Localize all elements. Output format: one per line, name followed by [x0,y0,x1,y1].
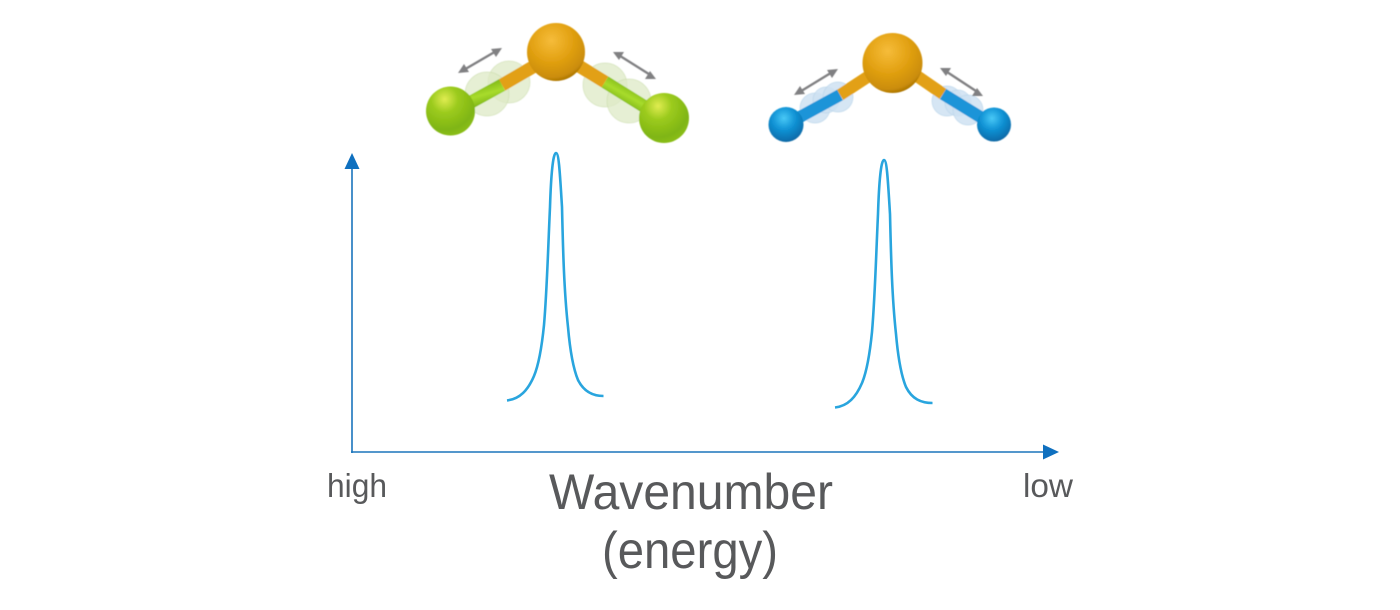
vibration arrow right [940,68,983,96]
bonds [462,63,650,110]
label: high: high [327,467,387,504]
axis title line 2: (energy) [602,522,778,580]
vibration ghost atoms [800,82,983,125]
atoms [527,23,585,81]
molecule: blue and gold bent molecule [768,33,1011,142]
spectrum peak left [507,153,604,400]
axis title line 1: Wavenumber [549,464,833,520]
molecule: green and gold bent molecule [426,23,689,143]
spectrum peak right [835,160,932,408]
vibration arrow right [613,52,656,79]
bonds [798,74,982,118]
atoms [862,33,922,93]
label: low: low [1023,467,1073,504]
y axis arrow [344,153,360,453]
vibration ghost atoms [465,61,651,123]
vibration arrow left [794,69,838,95]
vibration arrow left [458,48,502,73]
x axis arrow [351,444,1059,460]
